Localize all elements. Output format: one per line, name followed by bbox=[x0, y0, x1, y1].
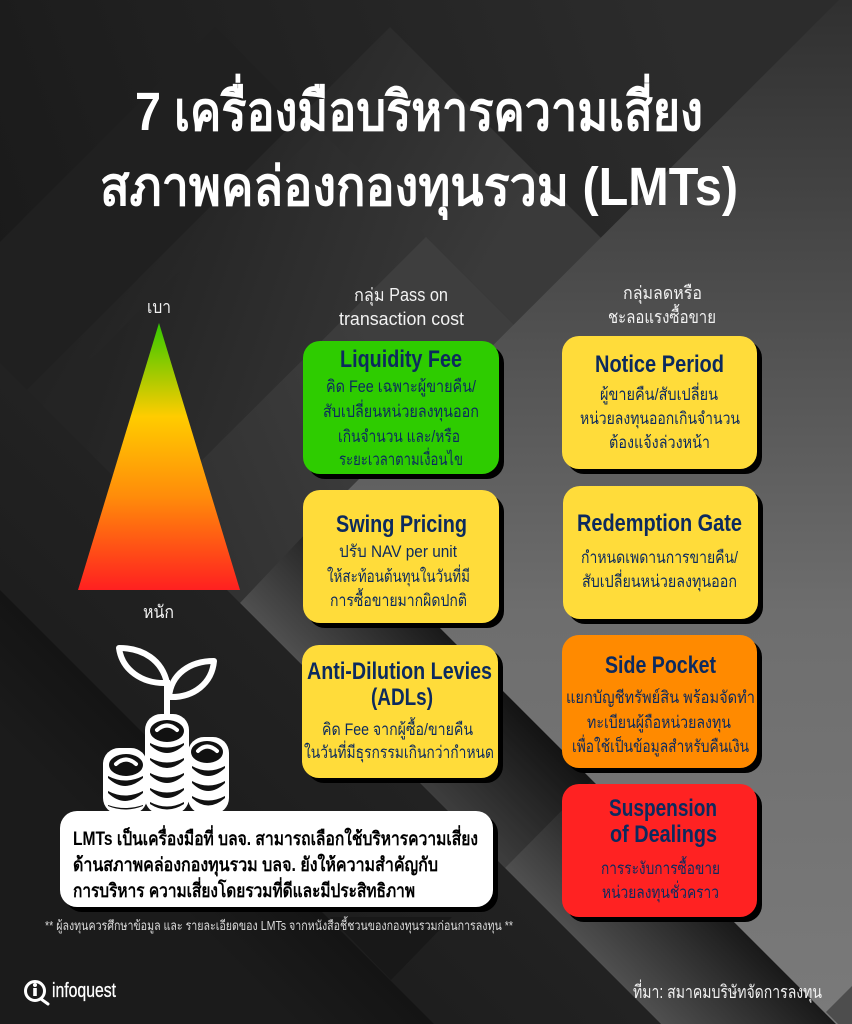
card: Suspension of Dealings: หน่วยลงทุนชั่วคราว bbox=[602, 880, 719, 903]
card: Notice Period: Notice Period bbox=[595, 351, 724, 378]
card: Anti-Dilution Levies bbox=[302, 645, 503, 783]
card: Liquidity Fee: คิด Fee เฉพาะผู้ขายคืน/ bbox=[326, 377, 476, 397]
card: Swing Pricing: การซื้อขายมากผิดปกติ bbox=[330, 588, 467, 610]
card: Liquidity Fee bbox=[303, 341, 504, 479]
callout: LMTs summary: ด้านสภาพคล่องกองทุนรวม บลจ. ยังให้ความสำคัญกับ bbox=[73, 853, 438, 877]
card: Notice Period: หน่วยลงทุนออกเกินจำนวน bbox=[580, 409, 740, 429]
card: Side Pocket: เพื่อใช้เป็นข้อมูลสำหรับคืนเงิน bbox=[572, 734, 749, 757]
callout: LMTs summary bbox=[60, 811, 498, 912]
footnote: ** ผู้ลงทุนควรศึกษาข้อมูล และ รายละเอียดของ LMTs จากหนังสือชี้ชวนของกองทุนรวมก่อนการลงทุน ** bbox=[45, 916, 513, 934]
logo: infoquest: infoquest bbox=[52, 980, 116, 1002]
column heading: pass on transaction cost: transaction cost bbox=[339, 309, 464, 329]
column heading: reduce or slow redemptions: ชะลอแรงซื้อขาย bbox=[608, 304, 716, 327]
card: Anti-Dilution Levies: ในวันที่มีธุรกรรมเกินกว่ากำหนด bbox=[304, 740, 494, 763]
callout: LMTs summary: LMTs เป็นเครื่องมือที่ บลจ. สามารถเลือกใช้บริหารความเสี่ยง bbox=[73, 825, 478, 850]
card: Side Pocket: แยกบัญชีทรัพย์สิน พร้อมจัดทำ bbox=[566, 688, 755, 707]
card: Notice Period bbox=[562, 336, 762, 474]
callout: LMTs summary: การบริหาร ความเสี่ยงโดยรวมที่ดีและมีประสิทธิภาพ bbox=[73, 877, 415, 902]
title bbox=[100, 73, 738, 221]
card: Liquidity Fee: สับเปลี่ยนหน่วยลงทุนออก bbox=[323, 399, 479, 422]
card: Suspension of Dealings: Suspension bbox=[609, 795, 717, 822]
card: Anti-Dilution Levies: คิด Fee จากผู้ซื้อ/ขายคืน bbox=[322, 717, 473, 740]
card: Redemption Gate: สับเปลี่ยนหน่วยลงทุนออก bbox=[582, 569, 737, 592]
logo: infoquest bbox=[26, 980, 116, 1004]
card: Liquidity Fee: Liquidity Fee bbox=[340, 346, 462, 373]
card: Side Pocket: ทะเบียนผู้ถือหน่วยลงทุน bbox=[587, 713, 731, 733]
title: 7 เครื่องมือบริหารความเสี่ยง bbox=[135, 73, 703, 142]
card: Swing Pricing: ปรับ NAV per unit bbox=[339, 542, 457, 561]
column heading: pass on transaction cost: กลุ่ม Pass on bbox=[354, 285, 448, 306]
card: Side Pocket bbox=[562, 635, 762, 773]
icon: plant growing from coin stacks bbox=[103, 648, 229, 814]
card: Liquidity Fee: ระยะเวลาตามเงื่อนไข bbox=[339, 447, 463, 469]
card: Notice Period: ต้องแจ้งล่วงหน้า bbox=[609, 433, 710, 452]
card: Swing Pricing: ให้สะท้อนต้นทุนในวันที่มี bbox=[327, 564, 470, 587]
risk scale: light label: เบา bbox=[147, 297, 171, 317]
card: Swing Pricing: Swing Pricing bbox=[336, 511, 467, 538]
card: Side Pocket: Side Pocket bbox=[605, 652, 716, 679]
risk scale triangle bbox=[78, 323, 240, 590]
card: Swing Pricing bbox=[303, 490, 504, 628]
card: Redemption Gate bbox=[563, 486, 763, 624]
card: Redemption Gate: Redemption Gate bbox=[577, 510, 742, 537]
column heading: reduce or slow redemptions: กลุ่มลดหรือ bbox=[623, 283, 702, 304]
column heading: reduce or slow redemptions bbox=[608, 283, 716, 327]
risk scale: heavy label: หนัก bbox=[143, 602, 174, 622]
card: Suspension of Dealings: of Dealings bbox=[610, 821, 717, 848]
column heading: pass on transaction cost bbox=[339, 285, 464, 329]
card: Liquidity Fee: เกินจำนวน และ/หรือ bbox=[338, 427, 460, 446]
card: Anti-Dilution Levies: Anti-Dilution Levies bbox=[307, 658, 492, 685]
card: Redemption Gate: กำหนดเพดานการขายคืน/ bbox=[581, 548, 738, 567]
title: สภาพคล่องกองทุนรวม (LMTs) bbox=[100, 157, 738, 221]
card: Anti-Dilution Levies: (ADLs) bbox=[371, 684, 433, 711]
card: Suspension of Dealings: การระงับการซื้อขาย bbox=[601, 856, 720, 878]
card: Notice Period: ผู้ขายคืน/สับเปลี่ยน bbox=[600, 382, 718, 405]
card: Suspension of Dealings bbox=[562, 784, 762, 922]
